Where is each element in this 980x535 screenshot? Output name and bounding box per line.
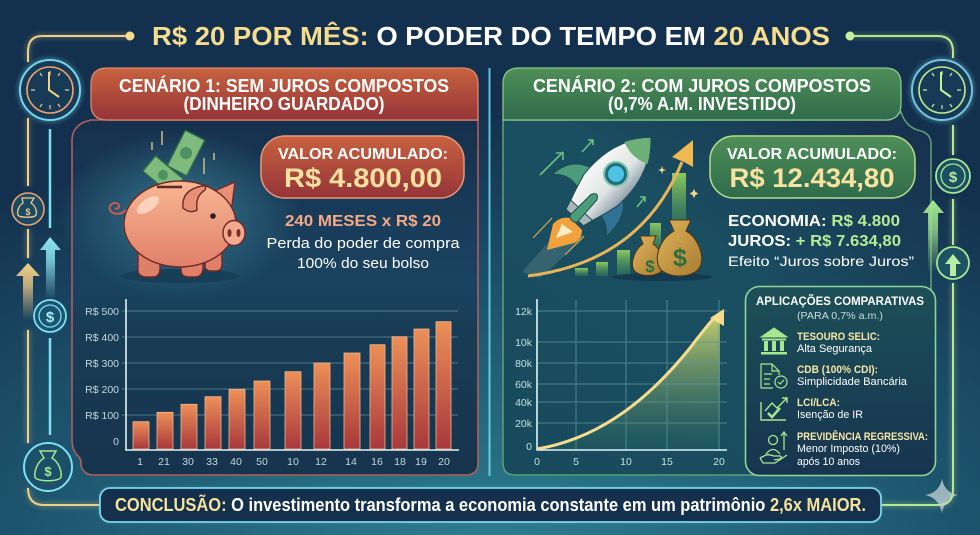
panel header: scenario 1 [91,68,478,120]
icon: document check [761,364,787,388]
item: CDB: CDB (100% CDI): [797,364,878,376]
conclusion banner: CONCLUSÃO: O investimento transforma a economia constante em um patrimônio 2,6x MAIOR. [115,494,866,515]
icon: right clock [912,60,972,120]
text block: scenario 1 details: 240 MESES x R$ 20 [285,213,441,230]
line chart: scenario 2: 0 [526,441,532,453]
bar chart: scenario 1: 14 [345,456,357,468]
line chart: scenario 2: 60k [515,379,533,391]
item: CDB: Simplicidade Bancária [797,376,908,388]
line chart: scenario 2: 40k [515,397,533,409]
vertical divider [487,68,492,476]
text block: scenario 1 details [266,213,460,272]
panel header: scenario 1: CENÁRIO 1: SEM JUROS COMPOSTOS [119,75,449,96]
item: LCI/LCA: Isenção de IR [797,409,863,421]
icon: large money bag: $ [44,464,52,479]
line chart: scenario 2: 20 [713,456,725,468]
item: Previdencia Regressiva [797,430,928,468]
bar chart: scenario 1: 21 [158,456,170,468]
icon: rocket with growth arrow and money bags: $ [673,244,687,272]
line chart: scenario 2: 12k [515,306,533,318]
panel header: scenario 2 [503,68,901,120]
icon: growth check chart [761,398,787,420]
panel header: scenario 2: CENÁRIO 2: COM JUROS COMPOSTOS [533,75,871,96]
text block: scenario 1 details: 100% do seu bolso [297,255,429,272]
bar chart: scenario 1: 30 [182,456,194,468]
conclusion banner [100,488,881,522]
line chart: scenario 2: 0 [534,456,540,468]
icon: left clock [20,60,80,120]
item: Tesouro Selic: TESOURO SELIC: [797,331,880,343]
icon: bank [761,328,787,354]
item: Previdencia Regressiva: após 10 anos [797,456,860,468]
bar chart: scenario 1: 50 [256,456,268,468]
callout: accumulated value 2: VALOR ACUMULADO: [727,146,897,163]
panel: comparative applications [746,286,936,476]
item: LCI/LCA: LCI/LCA: [797,397,840,409]
bar chart: scenario 1: 18 [394,456,406,468]
line chart: scenario 2: 15 [661,456,673,468]
bar chart: scenario 1: R$ 500 [85,306,119,318]
heading: comparative applications [756,295,924,322]
bar chart: scenario 1: 12 [315,456,327,468]
item: CDB [797,364,908,388]
line chart: scenario 2: 10k [515,337,533,349]
text block: scenario 2 details: Efeito “Juros sobre Juros” [728,253,914,269]
icon: rocket with growth arrow and money bags: $ [645,257,655,276]
heading: comparative applications: APLICAÇÕES COMPARATIVAS [756,295,924,308]
bar chart: scenario 1: 1 [137,456,143,468]
text block: scenario 2 details: ECONOMIA: R$ 4.800 [728,213,900,230]
icon: right dollar coin [936,159,970,193]
arrow: blue upward [40,237,61,300]
item: Tesouro Selic [797,331,880,355]
bar chart: scenario 1: 33 [206,456,218,468]
panel body: scenario 1 [72,120,478,475]
bar chart: scenario 1: 16 [371,456,383,468]
bar chart: scenario 1: 19 [415,456,427,468]
bar chart: scenario 1: 10 [287,456,299,468]
panel: scenario 2 [503,68,936,476]
arrow: green upward [923,200,944,272]
callout: accumulated value 2: R$ 12.434,80 [730,163,894,193]
bar chart: scenario 1: R$ 200 [85,384,119,396]
bar chart: scenario 1: R$ 400 [85,332,119,344]
item: Previdencia Regressiva: PREVIDÊNCIA REGRESSIVA: [797,430,928,443]
text block: scenario 1 details: Perda do poder de compra [266,235,460,252]
item: Tesouro Selic: Alta Segurança [797,343,873,355]
panel header: scenario 2: (0,7% A.M. INVESTIDO) [608,94,796,114]
icon: large money bag [24,443,72,491]
bar chart: scenario 1: 40 [230,456,242,468]
piggy bank halo [60,130,300,300]
panel header: scenario 1: (DINHEIRO GUARDADO) [184,94,384,114]
panel: scenario 1 [60,68,478,475]
callout: accumulated value 1 [261,136,464,198]
icon: person on hand [760,432,787,463]
icon: piggy bank with banknotes [110,130,245,283]
text block: scenario 2 details: JUROS: + R$ 7.634,80 [728,233,901,250]
bar chart: scenario 1 [85,299,459,468]
icon: money bag coin: $ [25,207,31,217]
callout: accumulated value 2 [710,136,915,198]
panel body: scenario 2 [503,112,931,475]
icon: dollar coin: $ [46,309,55,326]
bar chart: scenario 1: R$ 100 [85,410,119,422]
icon: arrow coin [937,247,969,279]
callout: accumulated value 1: R$ 4.800,00 [284,163,442,193]
heading: comparative applications: (PARA 0,7% a.m.) [797,310,883,322]
item: LCI/LCA [797,397,863,421]
arrow: yellow upward [16,263,40,320]
left timeline [12,32,134,505]
title: R$ 20 POR MÊS: O PODER DO TEMPO EM 20 ANOS [152,21,830,51]
line chart: scenario 2: 5 [573,456,579,468]
icon: money bag coin [12,193,44,225]
right timeline [846,32,972,505]
line chart: scenario 2 [515,299,727,468]
icon: right dollar coin: $ [949,169,958,186]
line chart: scenario 2: 10 [620,456,632,468]
icon: dollar coin [34,300,66,332]
line chart: scenario 2: 80k [515,358,533,370]
line chart: scenario 2: 20k [515,418,533,430]
bar chart: scenario 1: R$ 300 [85,358,119,370]
item: Previdencia Regressiva: Menor Imposto (10%) [797,443,900,455]
callout: accumulated value 1: VALOR ACUMULADO: [278,146,448,163]
bar chart: scenario 1: 0 [113,436,119,448]
text block: scenario 2 details [728,213,914,269]
icon: rocket with growth arrow and money bags [522,106,712,281]
bar chart: scenario 1: 20 [438,456,450,468]
icon: sparkle star [925,479,958,513]
